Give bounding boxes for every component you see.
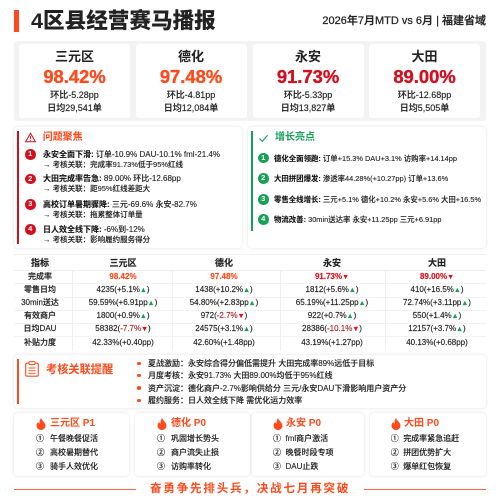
action card: 永安 P0: ① <box>273 434 281 443</box>
KPI card: 三元区: 环比-5.28pp <box>50 90 99 100</box>
row: 日均DAU: 28386(-10.1%▼) <box>302 324 362 333</box>
row: 零售日均: 410(+16.5%▲) <box>411 285 463 294</box>
row: 有效商户: 972(-2.7%▼) <box>201 311 247 320</box>
row: 补贴力度: 43.19%(+1.27pp) <box>301 338 363 346</box>
action card: 大田 P0: 爆单红包恢复 <box>403 462 451 470</box>
action card: 大田 P0: 大田 P0 <box>404 418 439 429</box>
action card: 德化 P0: ③ <box>157 462 165 470</box>
slogan: 奋勇争先排头兵，决战七月再突破 <box>150 483 350 495</box>
green accent bar <box>251 131 253 231</box>
row: 零售日均: 零售日均 <box>24 285 56 294</box>
row: 补贴力度: 42.60%(+1.48pp) <box>193 338 255 346</box>
row: 日均DAU: 58382(-7.7%▼) <box>95 324 151 333</box>
header row <box>31 258 446 268</box>
row: 零售日均: 1438(+10.2%▲) <box>195 285 253 294</box>
subtitle: period and region: 2026年7月MTD vs 6月 | 福建省域 <box>322 15 486 27</box>
heading: 增长亮点 <box>275 132 315 143</box>
action card: 德化 P0: 德化 P0 <box>171 418 206 429</box>
highlight 4: 4 <box>261 214 265 223</box>
icon: flame <box>36 418 46 430</box>
highlight 4: 物流改善: 30min送达率 永安+11.25pp 三元+6.91pp <box>274 215 441 224</box>
action card: 大田 P0: 拼团优势扩大 <box>403 448 451 456</box>
icon: check mark <box>259 134 268 142</box>
row: 日均DAU: 12157(+3.7%▲) <box>408 324 466 333</box>
row: 有效商户: 550(+1.4%▲) <box>413 311 461 320</box>
comparison table <box>14 254 486 351</box>
issue 4 <box>25 224 150 244</box>
row: 完成率 <box>28 272 454 281</box>
KPI card: 永安: 91.73% <box>277 66 339 87</box>
KPI card: 永安: 环比-5.33pp <box>284 90 332 100</box>
row: 日均DAU <box>24 324 466 333</box>
reminder list <box>137 358 406 405</box>
KPI card: 德化 <box>136 44 246 118</box>
highlight 1: 1 <box>261 152 265 162</box>
action card: 永安 P0 <box>252 413 364 476</box>
issue 2: → 考核关联：距95%红线差距大 <box>43 184 150 193</box>
row: 有效商户: 922(+0.7%▲) <box>308 311 356 320</box>
KPI card: 大田: 日均5,505单 <box>400 103 449 113</box>
reminder 4: 履约服务：日人效全线下降 需优化运力效率 <box>148 396 302 405</box>
KPI card: 三元区: 98.42% <box>43 66 106 87</box>
icon: flame <box>392 418 400 430</box>
row: 补贴力度: 40.13%(+0.68pp) <box>406 338 468 346</box>
header row: 永安 <box>323 258 341 268</box>
heading: 考核关联提醒 <box>46 364 113 376</box>
action card: 大田 P0: ② <box>391 448 399 456</box>
row: 30min送达: 30min送达 <box>21 298 59 307</box>
reminder 2: 月度考核：永安91.73% 大田89.00%均低于95%红线 <box>148 371 332 380</box>
panel: 考核关联提醒 <box>14 355 486 408</box>
action card: 永安 P0: ③ <box>273 462 281 470</box>
issue 4: 4 <box>28 224 32 233</box>
KPI card: 德化: 97.48% <box>160 66 222 87</box>
KPI card: 永安 <box>252 44 364 118</box>
row: 零售日均 <box>24 285 464 294</box>
action card: 三元区 P1: 三元区 P1 <box>50 418 95 429</box>
issue 1 <box>25 149 220 169</box>
heading: 问题聚焦 <box>43 132 83 143</box>
KPI card: 三元区: 日均29,541单 <box>47 103 102 113</box>
action card: 德化 P0 <box>135 413 250 476</box>
action card: 三元区 P1 <box>14 413 129 476</box>
title: 4区县经营赛马播报 <box>31 8 216 33</box>
action card: 德化 P0: 商户流失止损 <box>171 448 219 456</box>
row: 30min送达 <box>21 298 471 307</box>
row: 零售日均: 4235(+5.1%▲) <box>97 285 149 294</box>
issue 3: → 考核关联：拖累整体订单量 <box>43 210 143 219</box>
row: 30min送达: 59.59%(+6.91pp▲) <box>89 298 157 307</box>
row: 有效商户 <box>24 310 461 320</box>
KPI card: 三元区 <box>19 44 130 118</box>
highlight 3: 3 <box>261 194 265 203</box>
action card: 大田 P0: ③ <box>391 462 399 470</box>
action card: 三元区 P1: ③ <box>36 462 44 470</box>
highlight 1: 德化全面领跑: 订单+15.3% DAU+3.1% 访购率+14.14pp <box>274 154 457 162</box>
action card: 三元区 P1: ① <box>36 434 44 443</box>
row: 有效商户: 1800(+0.9%▲) <box>97 311 149 320</box>
issue 4: → 考核关联：影响履约服务得分 <box>43 235 150 244</box>
icon: flame <box>158 418 166 430</box>
action card: 永安 P0: 晚餐时段专项 <box>286 448 334 456</box>
header row: 指标 <box>31 258 49 268</box>
row: 补贴力度: 补贴力度 <box>24 338 56 346</box>
title accent bar <box>14 10 19 32</box>
KPI card: 永安: 日均13,827单 <box>281 103 335 113</box>
action card: 德化 P0: 巩固增长势头 <box>171 434 219 443</box>
reminder 1: 夏战激励：永安综合得分偏低需提升 大田完成率89%远低于目标 <box>148 359 374 368</box>
icon: clipboard <box>25 361 39 377</box>
row: 日均DAU: 24575(+3.1%▲) <box>195 324 253 333</box>
issue 2: 大田完成率告急: 89.00% 环比-12.68pp <box>43 174 181 183</box>
action card: 大田 P0 <box>370 413 486 476</box>
KPI card: 永安: 永安 <box>295 49 321 64</box>
row: 日均DAU: 日均DAU <box>24 324 56 333</box>
KPI card: 大田: 89.00% <box>393 66 456 87</box>
KPI card: 德化: 日均12,084单 <box>164 103 218 113</box>
KPI card: 大田 <box>369 44 480 118</box>
icon: flame <box>274 418 282 430</box>
issue 4: 日人效全线下降: -6%到-12% <box>43 224 145 234</box>
row: 完成率: 91.73%▼ <box>315 272 349 281</box>
issue 2: 2 <box>28 174 32 182</box>
issue 1: 永安全面下滑: 订单-10.9% DAU-10.1% fml-21.4% <box>43 150 220 158</box>
highlight 2: 2 <box>261 173 265 182</box>
issue 3: 3 <box>28 199 32 208</box>
action card: 三元区 P1: 午餐晚餐促活 <box>50 434 98 443</box>
action card: 永安 P0: ② <box>273 448 281 456</box>
issue 3 <box>25 199 197 219</box>
panel: 问题聚焦 <box>14 127 242 248</box>
action card: 三元区 P1: 骑手人效优化 <box>50 462 98 470</box>
reminder 3: 资产沉淀：德化商户-2.7%影响供给分 三元/永安DAU下滑影响用户资产分 <box>148 384 406 393</box>
action card: 三元区 P1: 高校暑期替代 <box>50 448 98 456</box>
issue 2 <box>25 174 181 193</box>
issue 3: 高校订单暑期骤降: 三元-69.6% 永安-82.7% <box>43 200 197 208</box>
row: 30min送达: 72.74%(+3.11pp▲) <box>403 298 471 307</box>
issue 1: → 考核关联：完成率91.73%低于95%红线 <box>43 160 183 169</box>
row: 有效商户: 有效商户 <box>24 311 56 320</box>
action card: 德化 P0: 访购率转化 <box>171 462 211 470</box>
KPI card: 大田: 环比-12.68pp <box>398 90 451 100</box>
issue 1: 1 <box>28 149 32 158</box>
KPI card: 德化: 德化 <box>178 49 204 64</box>
row: 完成率: 97.48% <box>210 272 238 281</box>
header row: 大田 <box>428 258 446 268</box>
row: 完成率: 89.00%▼ <box>420 272 454 281</box>
orange accent bar <box>17 359 19 404</box>
action card: 德化 P0: ① <box>157 434 165 443</box>
action card: 永安 P0: DAU止跌 <box>286 462 318 470</box>
panel: 增长亮点 <box>248 127 486 248</box>
panel: KPI cards <box>14 41 486 121</box>
KPI card: 大田: 大田 <box>411 49 438 64</box>
row: 补贴力度 <box>24 338 468 347</box>
KPI card: 三元区: 三元区 <box>55 49 94 64</box>
KPI card: 德化: 环比-4.81pp <box>167 90 215 100</box>
highlight 3: 零售全线增长: 三元+5.1% 德化+10.2% 永安+5.6% 大田+16.5% <box>274 195 481 204</box>
row: 30min送达: 54.80%(+2.83pp▲) <box>190 298 258 307</box>
action card: 德化 P0: ② <box>157 448 165 456</box>
row: 完成率: 98.42% <box>109 272 137 281</box>
action card: 三元区 P1: ② <box>36 448 44 456</box>
action card: 永安 P0: 永安 P0 <box>286 418 321 429</box>
row: 30min送达: 65.19%(+11.25pp▲) <box>296 298 368 307</box>
row: 完成率: 完成率 <box>28 272 52 281</box>
row: 零售日均: 1812(+5.6%▲) <box>306 285 358 294</box>
action card: 大田 P0: ① <box>391 434 399 443</box>
action card: 永安 P0: fml商户激活 <box>286 434 328 443</box>
red accent bar <box>17 131 19 244</box>
icon: warning triangle <box>25 132 36 142</box>
highlight 2: 大田拼团爆发: 渗透率44.28%(+10.27pp) 订单+13.6% <box>274 174 448 183</box>
row: 补贴力度: 42.33%(+0.40pp) <box>92 338 154 346</box>
action card: 大田 P0: 完成率紧急追赶 <box>403 434 459 443</box>
header row: 三元区 <box>109 258 137 268</box>
header row: 德化 <box>215 258 233 268</box>
